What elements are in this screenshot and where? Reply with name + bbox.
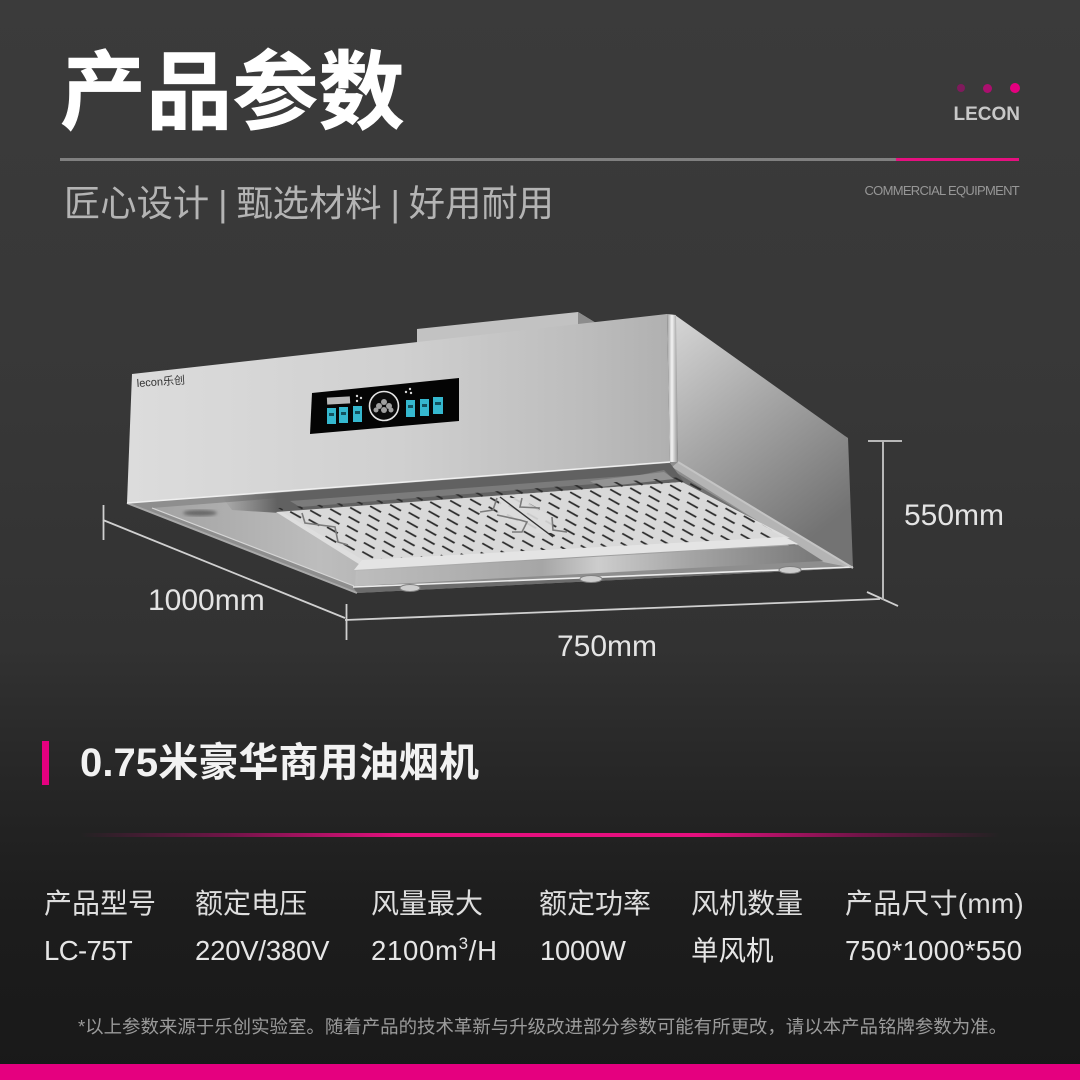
model heading: 0.75米豪华商用油烟机 [80,741,479,785]
brand logo: lecon乐创 [136,374,185,390]
dimension line: height [868,441,902,600]
subtitle: 匠心设计 | 甄选材料 | 好用耐用 [64,183,554,224]
filter brackets [302,498,567,545]
spec table: 2100m3/H [371,934,498,966]
spec: model: 产品型号 [44,888,156,919]
dimension line: depth [103,505,345,618]
upper dark band [222,463,684,513]
spec table [44,888,1024,966]
title: 产品参数 [60,45,405,141]
spec table: 1000W [540,935,626,966]
spec table: LC-75T [44,935,132,966]
dial [370,392,398,420]
front bottom edge [127,462,670,503]
underside [127,462,853,593]
left buttons [327,406,362,424]
dark spots [183,510,217,516]
grease filter panel [270,470,800,570]
dimension label: height: 550mm [904,499,1004,532]
commercial equipment label: COMMERCIAL EQUIPMENT [864,183,1019,198]
spec table: 220V/380V [195,935,329,966]
spec: size: 产品尺寸(mm) [845,888,1024,919]
right buttons [406,397,443,417]
small indicator dots [356,388,412,402]
front panel [127,314,670,503]
display readout [327,396,350,405]
duct box on top [417,312,596,343]
control panel [310,378,459,434]
corner highlight strip [667,314,678,462]
lip lower edge [353,568,853,593]
bottom pink bar [0,1064,1080,1080]
dimension label: width: 750mm [557,630,657,663]
center tile [497,498,553,533]
spec table: 单风机 [691,935,774,966]
spec: fans: 风机数量 [691,888,803,919]
model heading accent bar [42,741,49,785]
product illustration: range hood with dimension lines [102,312,902,640]
brand dots [957,83,1020,93]
footnote: *以上参数来源于乐创实验室。随着产品的技术革新与升级改进部分参数可能有所更改，请以本产品铭牌参数为准。 [78,1016,1007,1037]
gradient divider [80,833,1000,837]
header rule [60,158,1019,161]
mounting bolts [400,566,801,592]
front lip [355,545,823,586]
spec: voltage: 额定电压 [195,888,307,919]
side panel [675,315,853,568]
spec table: 750*1000*550 [845,935,1022,966]
filter seam [500,497,553,537]
brand name: LECON [954,104,1020,125]
right bevel [672,462,853,568]
dimension label: depth: 1000mm [148,584,265,617]
button glyphs [329,402,441,416]
dimension line: width [345,592,898,640]
spec: power: 额定功率 [539,888,651,919]
spec: airflow: 风量最大 [371,888,483,919]
